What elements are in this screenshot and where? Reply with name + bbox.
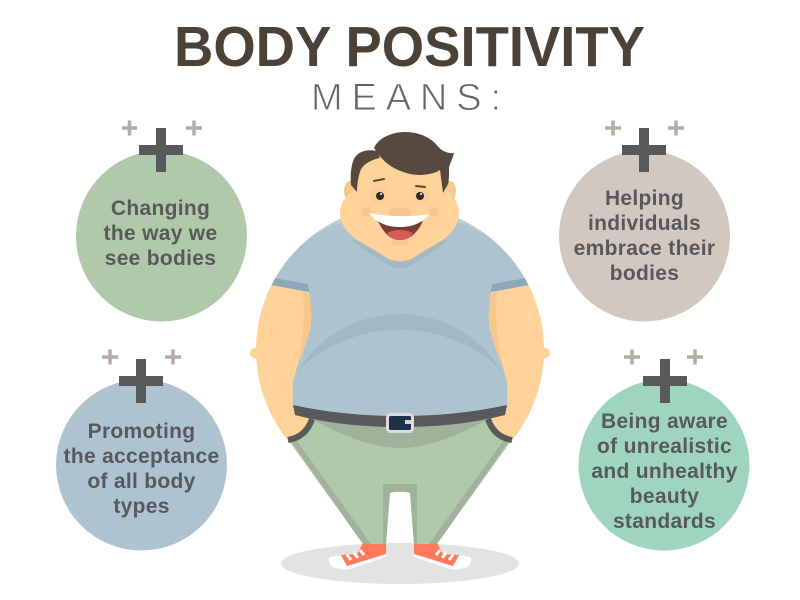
teeth — [369, 213, 430, 227]
panel: promoting the acceptance of all body types — [56, 350, 227, 550]
eyes — [376, 192, 384, 200]
head — [340, 132, 459, 261]
thumbs — [250, 348, 550, 358]
pockets — [288, 419, 512, 440]
panel: changing the way we see bodies: the way we — [104, 222, 217, 245]
panel: being aware of unrealistic and unhealthy beauty standards: beauty — [630, 485, 699, 508]
chin mark — [391, 238, 409, 246]
panel: being aware of unrealistic and unhealthy beauty standards: of unrealistic — [597, 435, 732, 458]
shoes — [329, 543, 471, 569]
eyebrows — [374, 179, 425, 187]
panel: changing the way we see bodies: Changing — [111, 197, 210, 220]
panel: promoting the acceptance of all body types: Promoting — [88, 420, 195, 443]
panel: helping individuals embrace their bodies: embrace their — [574, 237, 715, 260]
panel: helping individuals embrace their bodies: bodies — [610, 262, 679, 285]
arms — [250, 270, 550, 442]
panel: being aware of unrealistic and unhealthy beauty standards: standards — [613, 510, 716, 533]
arm shading — [292, 290, 508, 390]
ground shadow — [281, 543, 519, 584]
nose — [388, 208, 412, 218]
panel: promoting the acceptance of all body types: types — [113, 495, 170, 518]
trousers — [288, 419, 512, 544]
eye sockets — [370, 186, 388, 204]
belt — [293, 405, 507, 432]
face — [340, 145, 459, 261]
subtitle: MEANS: — [311, 77, 501, 119]
panel: helping individuals embrace their bodies: individuals — [588, 212, 701, 235]
hair — [351, 150, 380, 192]
panel: helping individuals embrace their bodies — [559, 120, 730, 322]
panel: changing the way we see bodies — [76, 120, 247, 322]
character illustration — [250, 132, 550, 584]
panel: being aware of unrealistic and unhealthy beauty standards: and unhealthy — [591, 460, 738, 483]
tongue — [387, 230, 413, 240]
panel: promoting the acceptance of all body types: the acceptance — [64, 445, 219, 468]
panel: being aware of unrealistic and unhealthy beauty standards — [578, 350, 750, 550]
panel: being aware of unrealistic and unhealthy beauty standards: Being aware — [601, 410, 728, 433]
ears — [344, 181, 356, 201]
title: BODY POSITIVITY — [174, 15, 645, 79]
shirt — [272, 218, 528, 416]
panel: promoting the acceptance of all body types: of all body — [87, 470, 196, 493]
panel: changing the way we see bodies: see bodies — [105, 247, 216, 270]
mouth — [378, 221, 423, 240]
cheeks — [361, 207, 371, 217]
panel: helping individuals embrace their bodies: Helping — [605, 187, 684, 210]
